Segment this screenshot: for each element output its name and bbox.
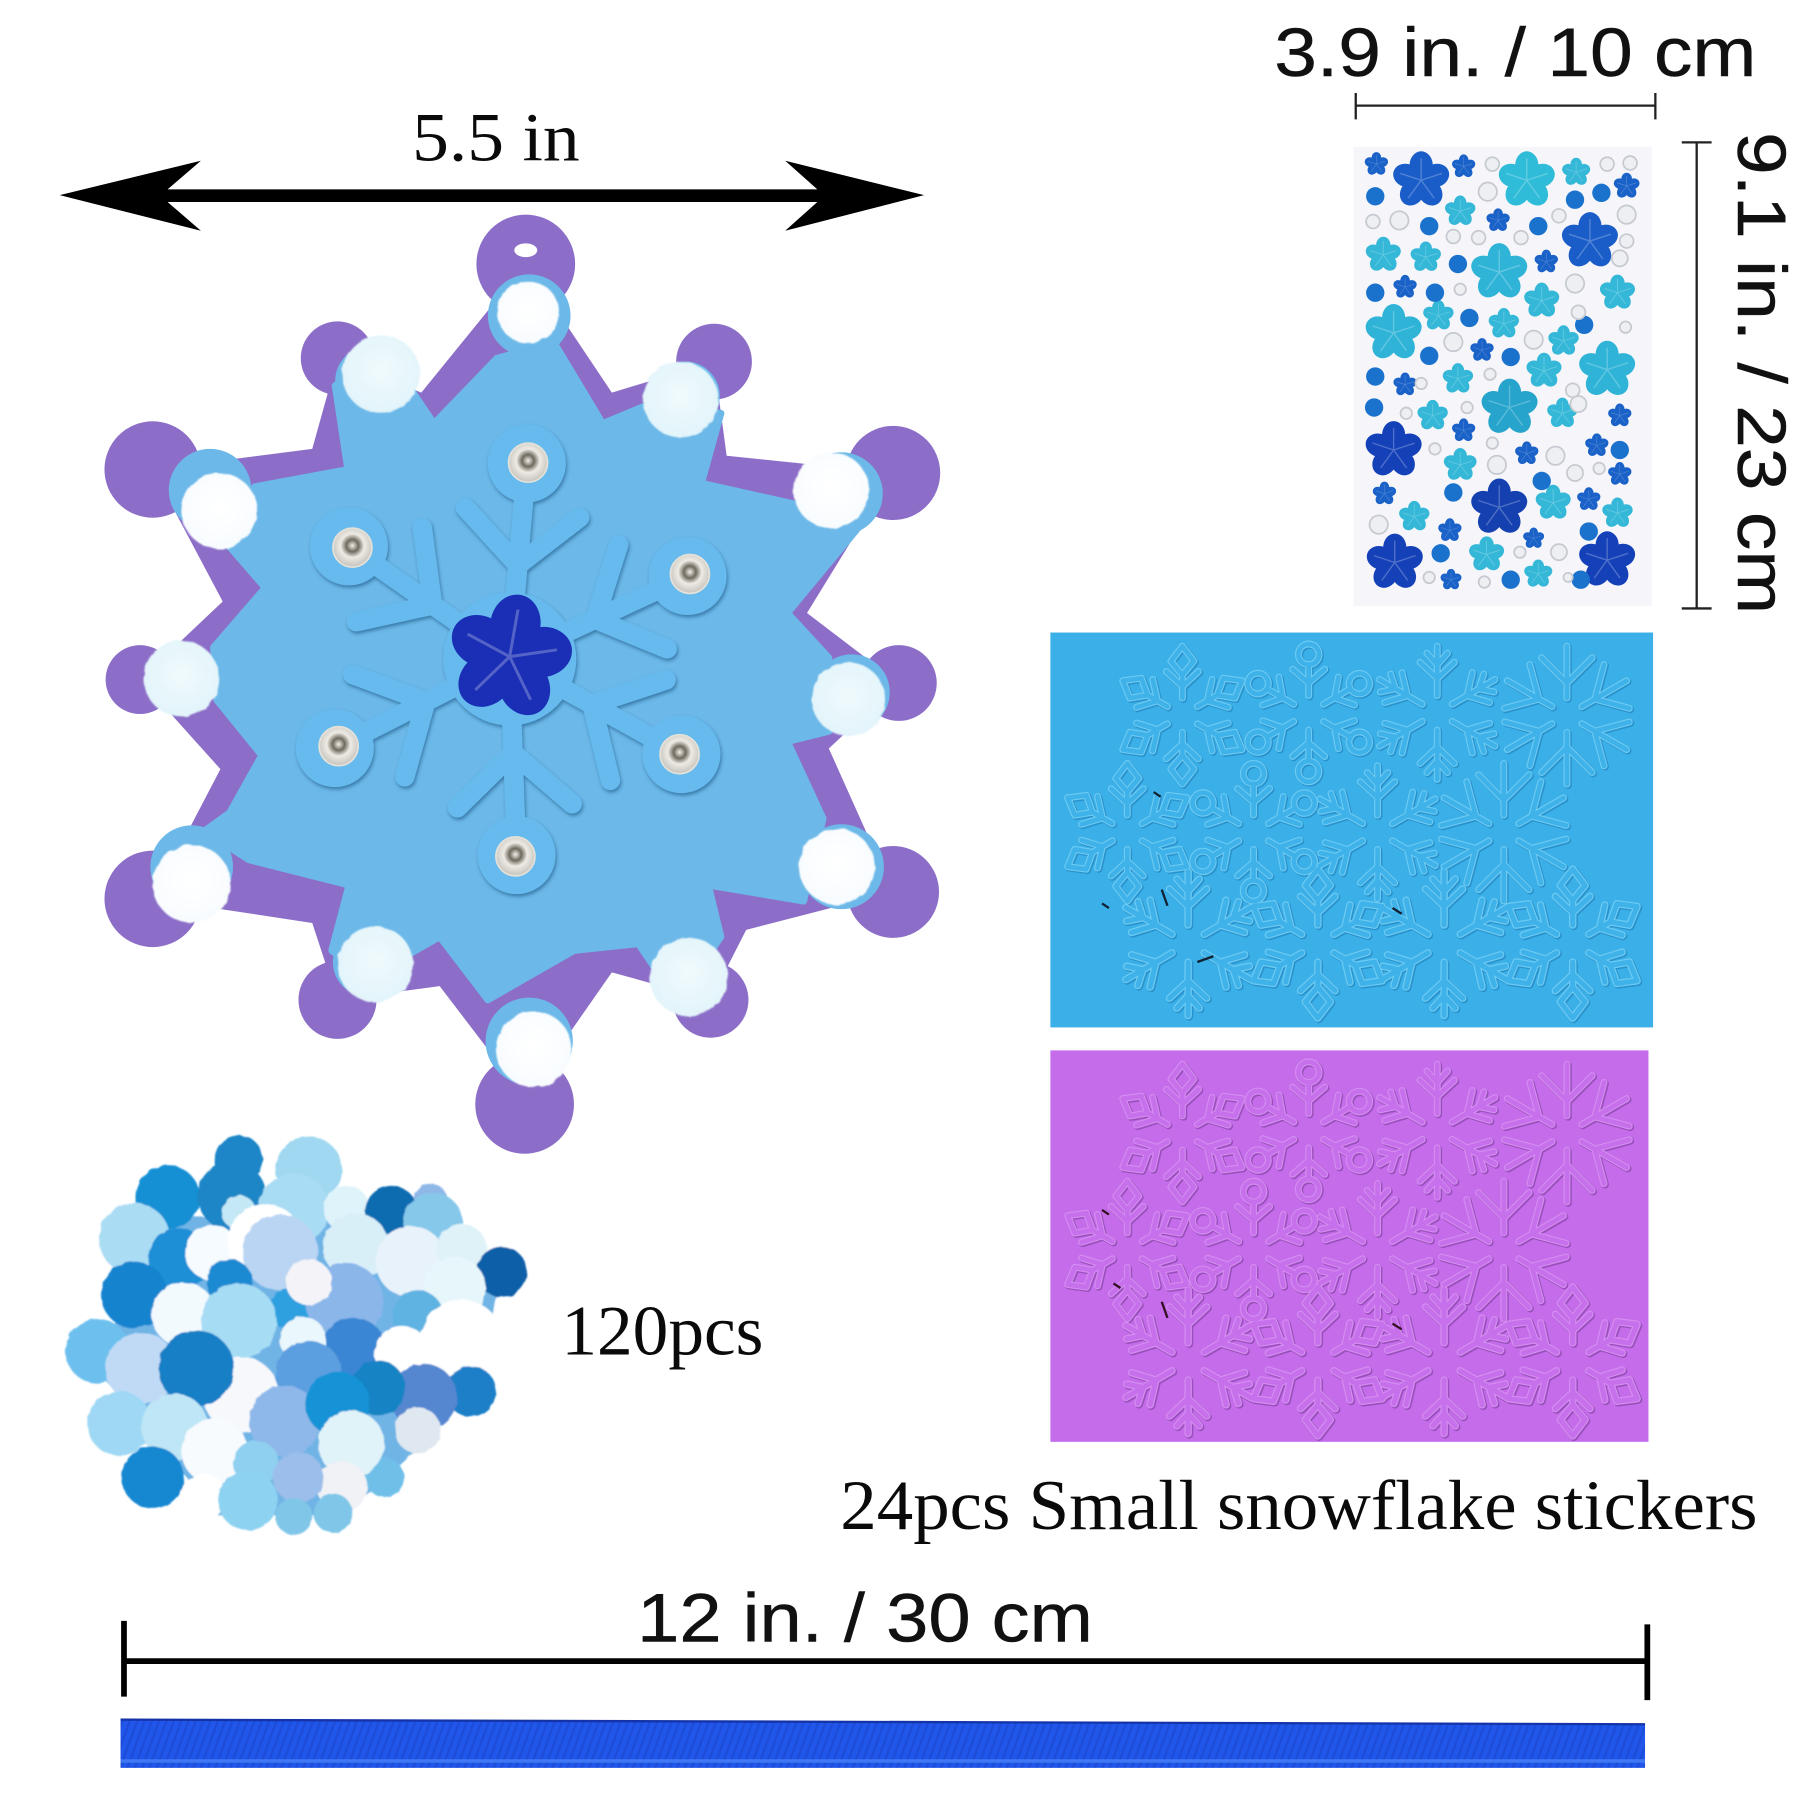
- silver round gems: [1366, 156, 1637, 588]
- medium teal flowers: [1364, 158, 1637, 589]
- inner snowflake with rhinestones: [274, 419, 747, 896]
- rhinestone flower sticker sheet: [1353, 147, 1652, 606]
- blue ribbon: [121, 1720, 1645, 1768]
- ornament: snowflake foam decoration: [104, 215, 940, 1154]
- dimension arrow: ornament width: [60, 161, 924, 231]
- label: 120pcs: 120pcs: [561, 1293, 763, 1371]
- label: 5.5 in: 5.5 in: [412, 100, 580, 176]
- small blue flowers: [1363, 152, 1641, 591]
- label: sticker sheet width: 3.9 in. / 10 cm: [1274, 14, 1756, 91]
- dimension line: sticker sheet width: [1356, 93, 1655, 119]
- dimension line: ribbon length: [124, 1621, 1647, 1700]
- round blue gems: [1365, 184, 1629, 589]
- pom-poms on ornament tips: [143, 281, 885, 1087]
- label: sticker sheet height: 9.1 in. / 23 cm: [1723, 132, 1800, 614]
- sticker sheet: purple embossed snowflakes: [1050, 1050, 1648, 1442]
- dimension line: sticker sheet height: [1682, 142, 1712, 608]
- label: 12 in. / 30 cm: 12 in. / 30 cm: [637, 1580, 1093, 1657]
- large flowers: [1363, 151, 1638, 593]
- purple foam backing: [104, 215, 940, 1154]
- center blue gem flower: [432, 583, 587, 733]
- label: 24pcs Small snowflake stickers: 24pcs Small snowflake stickers: [840, 1467, 1758, 1545]
- sticker sheet: blue embossed snowflakes: [1050, 633, 1653, 1027]
- pom-pom pile: [65, 1135, 527, 1535]
- blue foam star: [154, 278, 886, 1081]
